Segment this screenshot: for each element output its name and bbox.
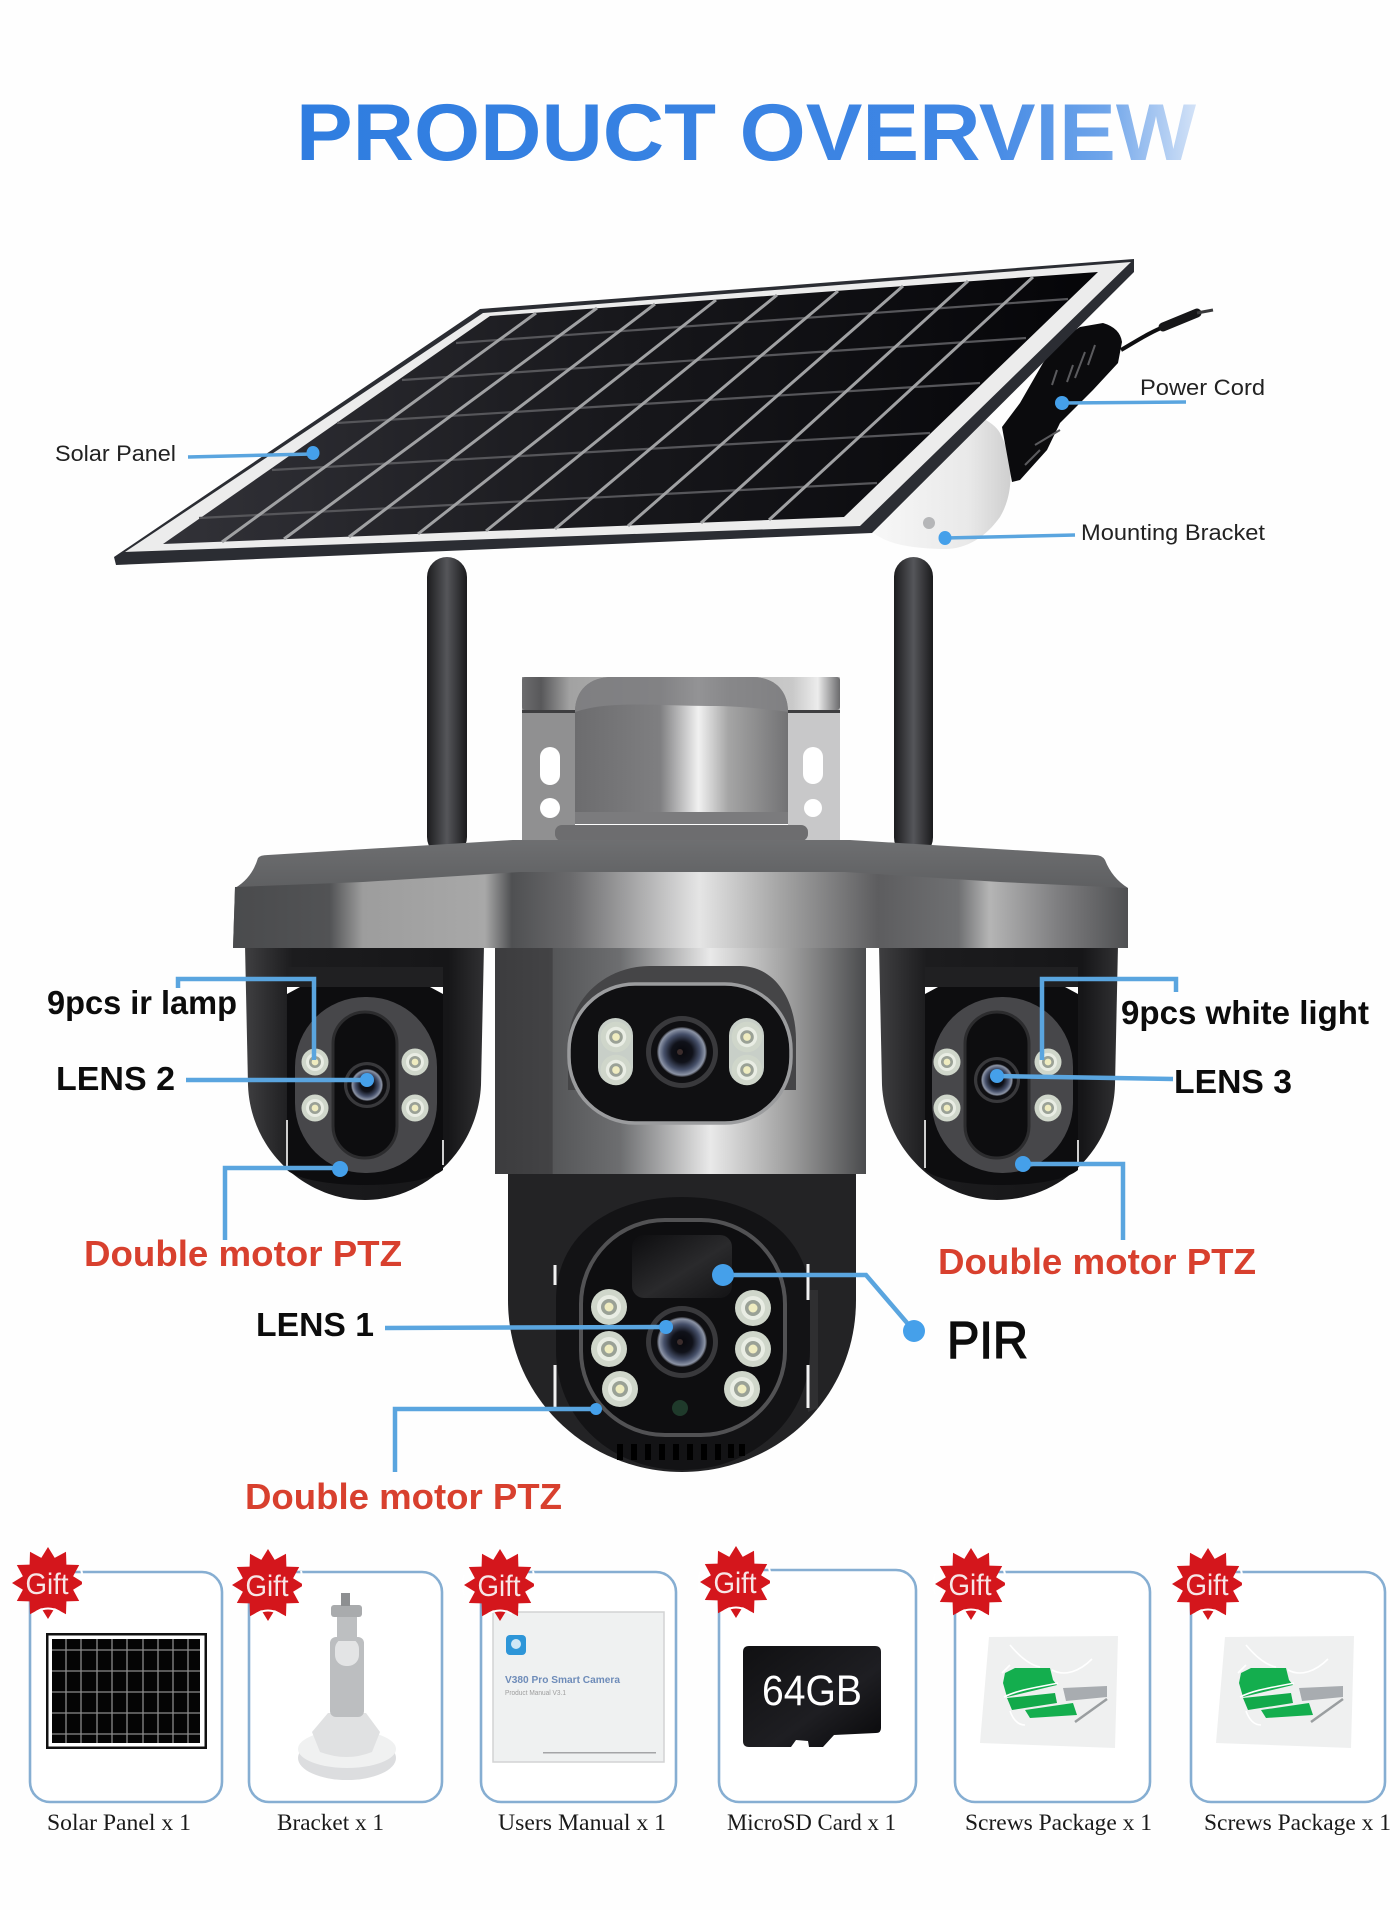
callout: mounting bracket [938, 520, 1265, 545]
screws bag [980, 1636, 1118, 1748]
gift badge [698, 1546, 772, 1618]
gift badge: Gift [478, 1570, 521, 1603]
central body with dual-lens panel [495, 948, 866, 1174]
callout: bottom double motor PTZ [245, 1403, 602, 1517]
mini solar panel icon [46, 1633, 207, 1749]
callout: 9pcs ir lamp: 9pcs ir lamp [47, 984, 237, 1021]
callout: solar panel [55, 441, 320, 466]
callout: bottom double motor PTZ: Double motor PTZ [245, 1476, 562, 1517]
callout: lens 2 [56, 1060, 374, 1097]
callout: lens 2: LENS 2 [56, 1060, 175, 1097]
callout: mounting bracket: Mounting Bracket [1081, 520, 1265, 545]
item card: bracket [230, 1549, 442, 1835]
screws bag [1216, 1636, 1354, 1748]
callout: PIR: PIR [947, 1312, 1028, 1370]
gift badge [934, 1548, 1007, 1620]
callout: lens 1: LENS 1 [256, 1306, 374, 1343]
solar panel [114, 259, 1134, 565]
caption: MicroSD Card x 1 [727, 1810, 896, 1835]
antennas [427, 557, 933, 857]
PIR window [632, 1235, 732, 1298]
callout: 9pcs ir lamp [47, 979, 314, 1060]
callout: PIR [712, 1264, 1028, 1370]
caption: Bracket x 1 [277, 1810, 384, 1835]
right camera [879, 945, 1118, 1200]
left camera [245, 945, 484, 1200]
callout: lens 3 [990, 1063, 1292, 1100]
camera roof [233, 840, 1128, 948]
microSD icon [743, 1646, 881, 1747]
callout: 9pcs white light [1042, 979, 1369, 1060]
microSD icon: 64GB [762, 1667, 862, 1715]
title: PRODUCT OVERVIEW [296, 88, 1197, 178]
item card: users manual [462, 1549, 676, 1835]
callout: lens 1 [256, 1306, 673, 1343]
gift badge: Gift [714, 1567, 757, 1600]
callout: right double motor PTZ: Double motor PTZ [938, 1241, 1256, 1282]
status light [672, 1400, 688, 1416]
caption: Solar Panel x 1 [47, 1810, 191, 1835]
manual cover: Product Manual V3.1 [505, 1688, 566, 1697]
gift badge: Gift [1186, 1569, 1229, 1602]
callout: solar panel: Solar Panel [55, 441, 176, 466]
gift badge [1170, 1548, 1244, 1620]
gift badge [462, 1549, 536, 1621]
illustration: bracket and power cord behind the solar panel [870, 310, 1213, 549]
manual cover [493, 1612, 664, 1762]
item card: screws package [934, 1548, 1152, 1835]
manual cover: V380 Pro Smart Camera [505, 1674, 620, 1686]
gift badge [230, 1549, 304, 1621]
callout: left double motor PTZ [84, 1161, 402, 1274]
callout: right double motor PTZ [938, 1156, 1256, 1282]
caption: Users Manual x 1 [498, 1810, 666, 1835]
item card: solar panel [10, 1547, 222, 1835]
wall mount plate and cylinder [522, 677, 840, 842]
item card: screws package 2 [1170, 1548, 1391, 1835]
gift badge [10, 1547, 84, 1619]
bracket icon [298, 1593, 396, 1780]
lower main camera [508, 1174, 856, 1472]
callout: power cord: Power Cord [1140, 375, 1265, 400]
callout: left double motor PTZ: Double motor PTZ [84, 1233, 402, 1274]
caption: Screws Package x 1 [965, 1810, 1152, 1835]
item card: microSD card [698, 1546, 916, 1835]
caption: Screws Package x 1 [1204, 1810, 1391, 1835]
callout: lens 3: LENS 3 [1174, 1063, 1292, 1100]
gift badge: Gift [26, 1568, 69, 1601]
speaker grille [620, 1444, 742, 1460]
callout: 9pcs white light: 9pcs white light [1121, 994, 1369, 1031]
callout: power cord [1055, 375, 1265, 410]
gift badge: Gift [246, 1570, 289, 1603]
main lens [646, 1306, 718, 1378]
gift badge: Gift [948, 1569, 992, 1602]
LED array [591, 1289, 771, 1407]
